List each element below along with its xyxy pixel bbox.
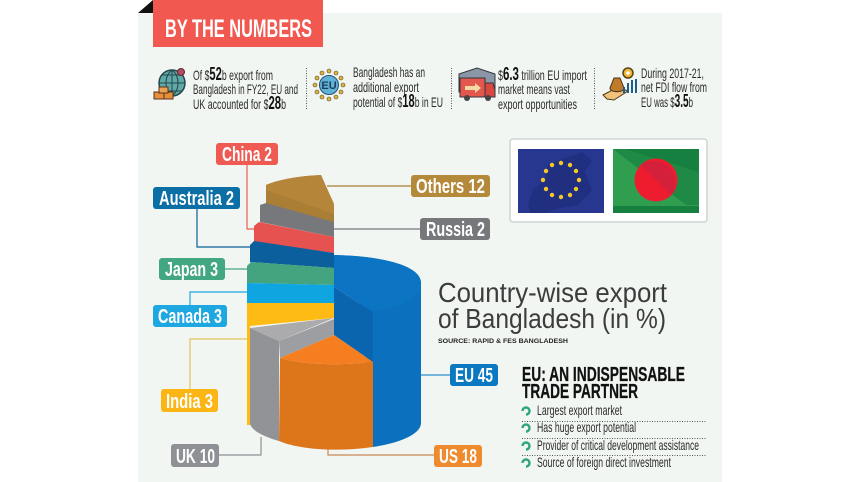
label: UK [171, 444, 219, 468]
slice: Russia [260, 203, 334, 237]
subheading: EU trade partner: EU: AN INDISPENSABLE [522, 364, 685, 386]
label: US [434, 445, 482, 468]
heading tab: by the numbers [138, 0, 323, 47]
slice: China [254, 222, 334, 253]
Bangladesh flag [613, 149, 699, 213]
icon: money bag and chart [603, 68, 637, 100]
slice: UK [250, 318, 334, 441]
label: EU [450, 364, 498, 387]
bullet list: Has huge export potential [537, 419, 636, 435]
label: India: India 3 [166, 391, 213, 413]
icon: EU stars [313, 69, 345, 101]
chart title [438, 277, 667, 334]
EU flag [518, 149, 604, 213]
icon: warehouse truck [459, 68, 495, 101]
stat text: 52b export: UK accounted for $28b [193, 93, 286, 113]
stat text: EU import market: $6.3 trillion EU import [498, 64, 587, 84]
stat text: net FDI: net FDI flow from [641, 79, 707, 95]
chart title: of Bangladesh (in %) [438, 303, 666, 334]
label: Others: Others 12 [416, 176, 485, 198]
bullet list: Provider of critical development assistance [537, 437, 699, 453]
stat text: export potential [353, 64, 443, 111]
leader lines [190, 165, 450, 455]
icon: EU stars: EU [321, 80, 337, 92]
chart: 3D pie of country-wise export [190, 165, 450, 455]
label: Russia [420, 218, 490, 241]
stat text: 52b export [193, 64, 298, 113]
slice: Australia [250, 241, 334, 268]
slice: India [247, 303, 334, 425]
stat text: net FDI [641, 65, 707, 111]
source note: SOURCE: RAPID & FES BANGLADESH [438, 338, 568, 345]
label: EU: EU 45 [455, 365, 493, 387]
bullet list: Source of foreign direct investment [537, 454, 671, 470]
stat text: 52b export: Of $52b export from [193, 64, 273, 84]
heading tab: by the numbers: BY THE NUMBERS [165, 15, 312, 43]
stat text: export potential: additional export [353, 79, 419, 95]
stat text: export potential: Bangladesh has an [353, 64, 425, 80]
stat text: net FDI: During 2017-21, [641, 65, 704, 81]
background panel [138, 13, 722, 482]
bullet list: Largest export market [537, 402, 622, 418]
label: UK: UK 10 [176, 446, 215, 468]
slice: Japan [247, 262, 334, 285]
stat text: export potential: potential of $18b in EU [353, 91, 443, 111]
slice: Canada [247, 283, 334, 303]
stat text: EU import market: market means vast [498, 81, 570, 97]
stat text: EU import market [498, 64, 587, 112]
slice: Others [266, 175, 334, 228]
bullet list [522, 402, 707, 470]
subheading: EU trade partner [522, 364, 685, 403]
stat text: 52b export: Bangladesh in FY22, EU and [193, 81, 298, 97]
icon: globe with parcels [154, 68, 185, 99]
label: US: US 18 [439, 446, 477, 468]
slice: US [279, 335, 373, 450]
label: Australia: Australia 2 [159, 188, 234, 210]
stat text: net FDI: EU was $3.5b [641, 91, 693, 111]
label: China [216, 143, 278, 166]
slice: EU [334, 255, 421, 447]
label: China: China 2 [222, 144, 272, 166]
label: Japan: Japan 3 [165, 259, 218, 281]
stat text: EU import market: export opportunities [498, 96, 577, 112]
flags card [510, 139, 707, 222]
label: Canada: Canada 3 [158, 306, 222, 328]
label: Russia: Russia 2 [426, 219, 485, 241]
chart title: Country-wise export [438, 277, 667, 308]
subheading: EU trade partner: TRADE PARTNER [522, 381, 638, 403]
